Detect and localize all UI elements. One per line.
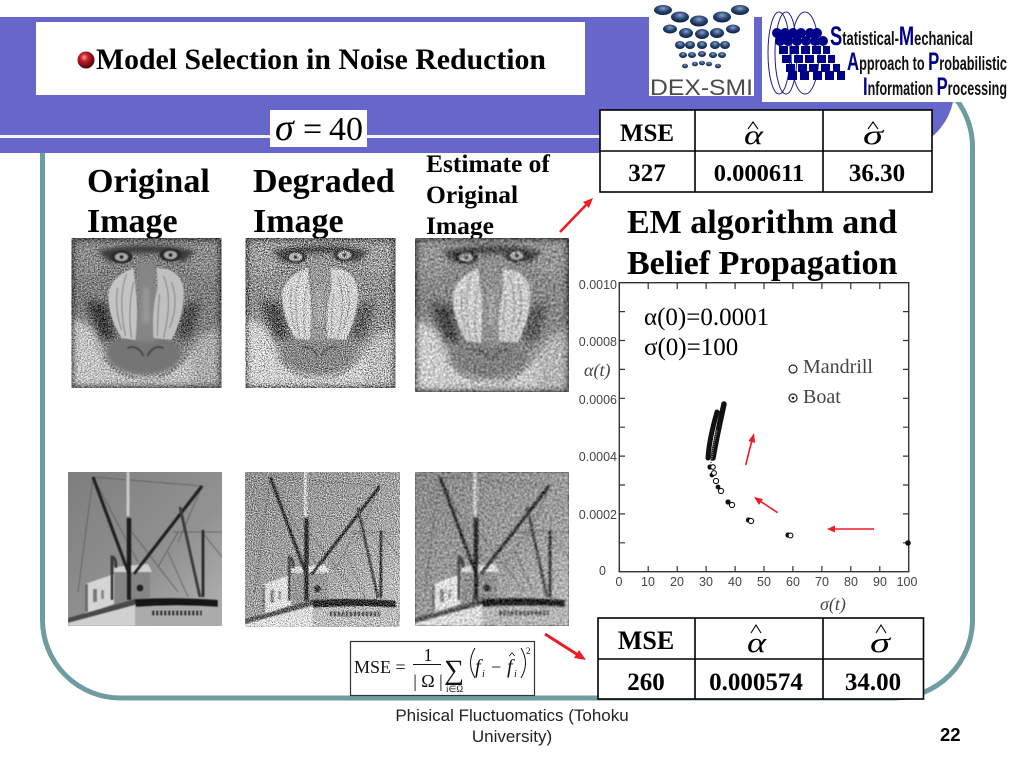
table: boat results: 34.00 — [845, 669, 901, 696]
table: boat results: α — [747, 627, 767, 659]
arrow: to top table — [560, 205, 586, 232]
heading: original image: Image — [87, 203, 178, 240]
x axis labels: 100 — [897, 575, 917, 589]
y axis labels: 0.0010 — [579, 278, 617, 292]
heading: EM algorithm: Belief Propagation — [627, 245, 897, 282]
title box — [36, 22, 585, 95]
heading: EM algorithm: EM algorithm and — [627, 204, 897, 241]
x axis labels: 30 — [699, 575, 713, 589]
table: mandrill results: 0.000611 — [714, 160, 804, 187]
teal rounded frame — [42, 69, 972, 698]
x axis labels: 20 — [670, 575, 684, 589]
formula: MSE definition: f — [507, 656, 515, 678]
arrows: convergence direction — [746, 433, 874, 532]
table: mandrill results: 327 — [628, 160, 666, 187]
footer text: University) — [472, 727, 552, 746]
page number: 22 — [940, 724, 961, 745]
x axis labels — [616, 575, 917, 589]
x axis labels: 90 — [873, 575, 887, 589]
table: mandrill results: 36.30 — [849, 160, 905, 187]
image: mandrill degraded — [246, 238, 396, 388]
image: boat original — [68, 472, 222, 626]
y axis labels: 0.0008 — [579, 335, 617, 349]
image: mandrill original — [72, 238, 222, 388]
formula: MSE definition: i — [514, 669, 517, 680]
heading: degraded image: Image — [253, 203, 344, 240]
axis titles: α(t) — [584, 360, 610, 381]
formula: MSE definition: i∈Ω — [446, 684, 463, 694]
y axis labels — [579, 278, 617, 578]
formula: MSE definition: 1 — [424, 645, 432, 665]
logo: DEX-SMI: DEX-SMI — [650, 75, 753, 100]
formula: MSE definition: 2 — [526, 646, 530, 656]
y axis labels: 0.0002 — [579, 508, 617, 522]
formula: MSE definition: MSE = — [354, 657, 406, 677]
sigma value label: = — [303, 111, 322, 148]
x axis labels: 60 — [786, 575, 800, 589]
chart: EM trajectory — [579, 278, 917, 615]
footer text: Phisical Fluctuomatics (Tohoku — [395, 706, 629, 725]
white band line — [0, 135, 600, 138]
sigma value label — [270, 107, 367, 149]
logo: statistical-mechanical approach — [762, 12, 1024, 102]
blue header band — [0, 17, 953, 153]
table: boat results: MSE — [618, 626, 674, 655]
y axis labels: 0 — [599, 564, 606, 578]
heading: degraded image: Degraded — [253, 163, 395, 200]
formula: MSE definition: i — [482, 669, 485, 680]
formula: MSE definition — [350, 642, 534, 696]
table: boat results: σ — [870, 627, 892, 659]
icon: red bullet — [78, 52, 94, 68]
x axis labels: 10 — [641, 575, 655, 589]
chart: EM trajectory: σ(t) — [820, 594, 846, 615]
y axis labels: 0.0006 — [579, 393, 617, 407]
table: boat results: 0.000574 — [709, 669, 803, 696]
x axis labels: 70 — [815, 575, 829, 589]
sigma value label: 40 — [329, 111, 363, 148]
x axis labels: 80 — [844, 575, 858, 589]
x axis labels: 0 — [616, 575, 623, 589]
formula: MSE definition: f — [475, 656, 483, 678]
image: boat estimate — [415, 472, 569, 626]
title: Model Selection in Noise Reduction — [96, 43, 546, 76]
logo: statistical-mechanical approach: Statistical-Mechanical — [830, 21, 973, 51]
data: boat and mandrill trajectories — [707, 404, 911, 546]
image: mandrill estimate — [415, 238, 569, 392]
table: boat results — [598, 618, 924, 699]
sigma value label: σ — [275, 107, 295, 149]
formula: MSE definition: ∑ — [444, 655, 464, 686]
arrow: formula to bottom table — [545, 634, 578, 655]
table: mandrill results: α — [744, 120, 764, 150]
image: boat degraded — [245, 472, 400, 627]
legend: Boat — [803, 386, 841, 408]
heading: original image: Original — [87, 163, 210, 200]
heading: estimate of original image: Image — [426, 211, 494, 240]
table: mandrill results — [600, 110, 932, 192]
legend — [789, 356, 873, 408]
table: boat results: 260 — [627, 669, 665, 696]
table: mandrill results: MSE — [620, 120, 674, 147]
table: mandrill results: σ — [863, 120, 886, 150]
x axis labels: 40 — [728, 575, 742, 589]
legend: Mandrill — [803, 356, 873, 378]
x axis labels: 50 — [757, 575, 771, 589]
heading: estimate of original image: Estimate of — [426, 149, 550, 178]
initial values: σ(0)=100 — [644, 334, 738, 361]
formula: MSE definition: − — [491, 657, 501, 677]
formula: MSE definition: | Ω | — [413, 671, 443, 691]
y axis labels: 0.0004 — [579, 450, 617, 464]
heading: estimate of original image: Original — [426, 180, 518, 209]
logo: DEX-SMI — [649, 5, 754, 100]
initial values: α(0)=0.0001 — [644, 304, 769, 331]
